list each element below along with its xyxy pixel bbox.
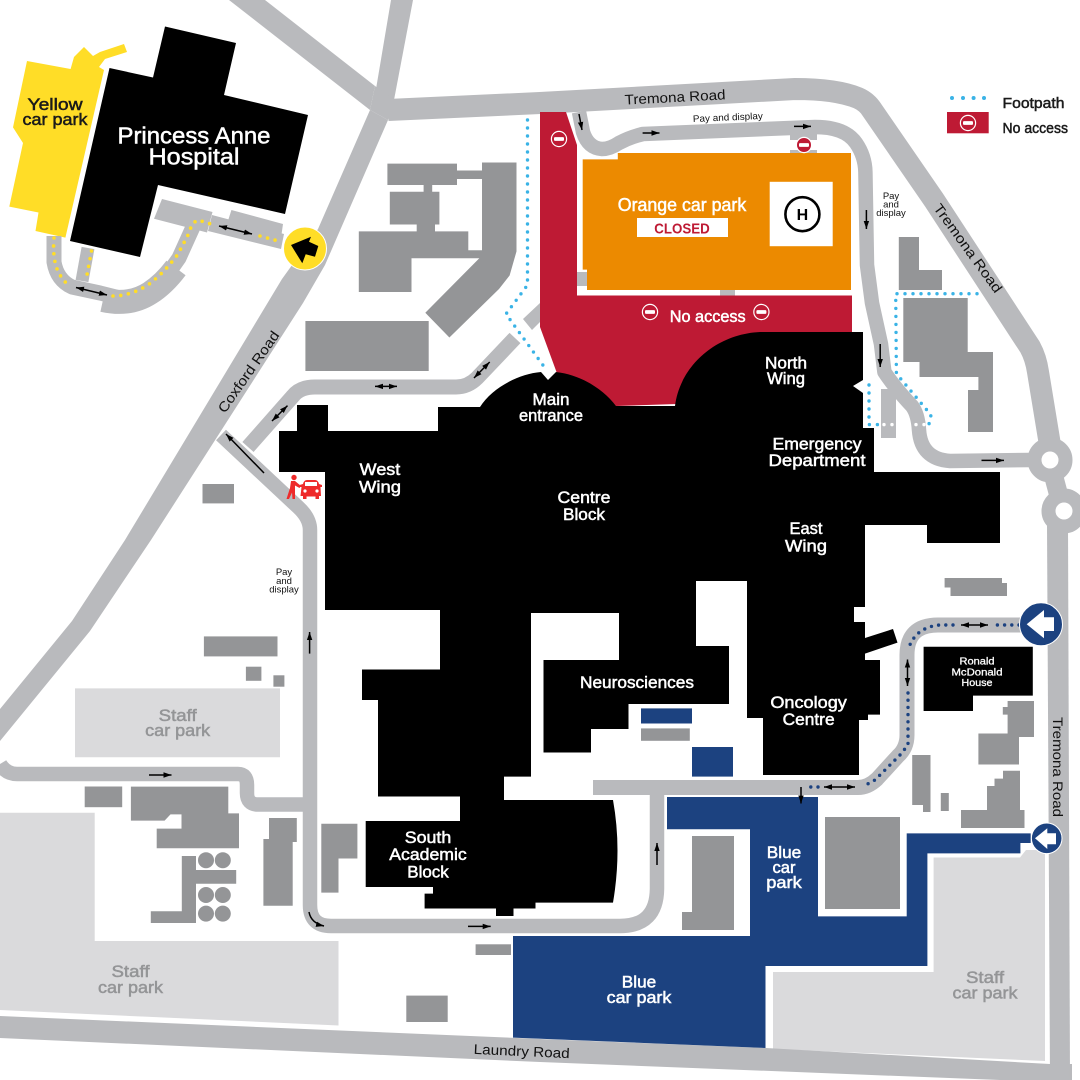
label: Yellow car park: Yellow <box>28 96 83 114</box>
Princess Anne Hospital building <box>70 26 308 257</box>
label: South Academic Block: Academic <box>389 846 467 864</box>
label: Oncology Centre: Oncology <box>770 694 848 712</box>
footpath crossing the road <box>884 423 926 426</box>
label: Staff car park north <box>145 707 211 740</box>
road name: Tremona Road east: Tremona Road <box>1050 717 1066 817</box>
label: Staff car park east: Staff <box>966 969 1004 987</box>
note: pay and display east <box>876 191 906 219</box>
label: No access: No access <box>670 308 746 326</box>
label: North Wing <box>765 354 807 388</box>
label: Main entrance <box>519 391 583 425</box>
note: pay and display west: Pay <box>276 567 292 578</box>
label: Staff car park north: Staff <box>159 707 197 725</box>
label: Ronald McDonald House: Ronald <box>960 655 995 667</box>
label: Oncology Centre <box>770 694 848 729</box>
note: pay and display east: and <box>883 200 899 211</box>
legend <box>947 95 1068 137</box>
label: Centre Block: Block <box>563 506 606 524</box>
label: Main entrance: Main <box>532 391 570 409</box>
navy footpath <box>806 625 1019 787</box>
orange car park <box>583 153 851 290</box>
label: Blue car park lower: Blue <box>622 974 656 992</box>
label: Blue car park upper: park <box>766 874 803 892</box>
yellow footpath <box>54 220 282 296</box>
Ronald McDonald House building <box>924 647 1033 711</box>
label: Blue car park lower: car park <box>607 989 672 1007</box>
label: West Wing <box>359 461 401 496</box>
label: Orange car park: CLOSED <box>654 220 710 237</box>
label: Ronald McDonald House: House <box>962 677 993 689</box>
label: Yellow car park: car park <box>22 111 88 129</box>
label: Staff car park east <box>952 969 1018 1003</box>
label: Blue car park upper <box>766 844 803 892</box>
label: Emergency Department: Department <box>768 452 866 470</box>
label: Staff car park north: car park <box>145 722 211 740</box>
label: Centre Block: Centre <box>558 489 610 507</box>
main hospital buildings <box>279 332 1000 916</box>
label: Main entrance: entrance <box>519 407 583 425</box>
helipad <box>770 182 833 246</box>
label: Orange car park: Orange car park <box>618 195 747 215</box>
label: Princess Anne Hospital <box>118 123 270 170</box>
label: Oncology Centre: Centre <box>783 711 835 729</box>
helipad: H <box>797 207 808 224</box>
Princess Anne access roads <box>54 199 284 302</box>
label: Staff car park west: car park <box>98 979 164 997</box>
note: pay and display west <box>269 567 299 596</box>
label: Ronald McDonald House <box>952 655 1003 689</box>
note: pay and display west: and <box>276 576 292 587</box>
grey surrounding buildings <box>85 162 1034 1022</box>
sky-blue footpaths <box>506 120 977 425</box>
staff car parks <box>0 688 1045 1061</box>
label: Princess Anne Hospital: Princess Anne <box>118 123 270 149</box>
label: East Wing <box>785 520 827 556</box>
legend: no access: No access <box>1002 120 1068 137</box>
label: South Academic Block: South <box>405 829 451 847</box>
label: Yellow car park <box>22 96 88 129</box>
icon: drop-off person and car <box>286 475 322 499</box>
icon: blue entrance arrow north <box>1020 603 1062 646</box>
icon: yellow entrance arrow <box>284 227 326 270</box>
label: Blue car park upper: Blue <box>767 844 801 862</box>
label: Staff car park west: Staff <box>112 963 150 981</box>
road name: Laundry Road: Laundry Road <box>473 1041 570 1061</box>
label: Blue car park lower <box>607 974 672 1007</box>
road direction arrows <box>76 114 1004 926</box>
yellow car park <box>9 44 127 238</box>
note: pay and display north: Pay and display <box>693 111 763 125</box>
note: pay and display east: Pay <box>883 191 899 202</box>
label: North Wing: Wing <box>767 370 805 388</box>
legend: footpath: Footpath <box>1002 95 1064 112</box>
label: Princess Anne Hospital: Hospital <box>148 144 240 170</box>
road name: Tremona Road north: Tremona Road <box>624 86 726 108</box>
label: Staff car park east: car park <box>952 985 1018 1003</box>
label: Staff car park west <box>98 963 164 997</box>
label: East Wing: Wing <box>785 538 827 556</box>
red no access zone <box>540 112 852 406</box>
label: Emergency Department: Emergency <box>772 435 862 453</box>
road name: Tremona Road diagonal: Tremona Road <box>930 200 1006 296</box>
blue small car parks <box>641 708 733 777</box>
no access symbols <box>551 131 812 320</box>
label: West Wing: Wing <box>359 478 401 496</box>
label: South Academic Block: Block <box>407 864 450 882</box>
label: North Wing: North <box>765 354 807 372</box>
road name: Coxford Road: Coxford Road <box>214 328 282 416</box>
icon: blue entrance arrow south <box>1031 823 1062 854</box>
label: Centre Block <box>558 489 610 524</box>
label: Orange car park <box>618 195 747 237</box>
note: pay and display east: display <box>876 208 906 219</box>
label: Emergency Department <box>768 435 866 470</box>
label: Neurosciences: Neurosciences <box>580 674 694 692</box>
note: pay and display west: display <box>269 584 299 596</box>
label: Ronald McDonald House: McDonald <box>952 666 1003 678</box>
label: West Wing: West <box>360 461 401 479</box>
label: South Academic Block <box>389 829 467 882</box>
label: East Wing: East <box>790 520 823 538</box>
blue car park <box>513 797 1031 1048</box>
label: Blue car park upper: car <box>772 859 796 877</box>
